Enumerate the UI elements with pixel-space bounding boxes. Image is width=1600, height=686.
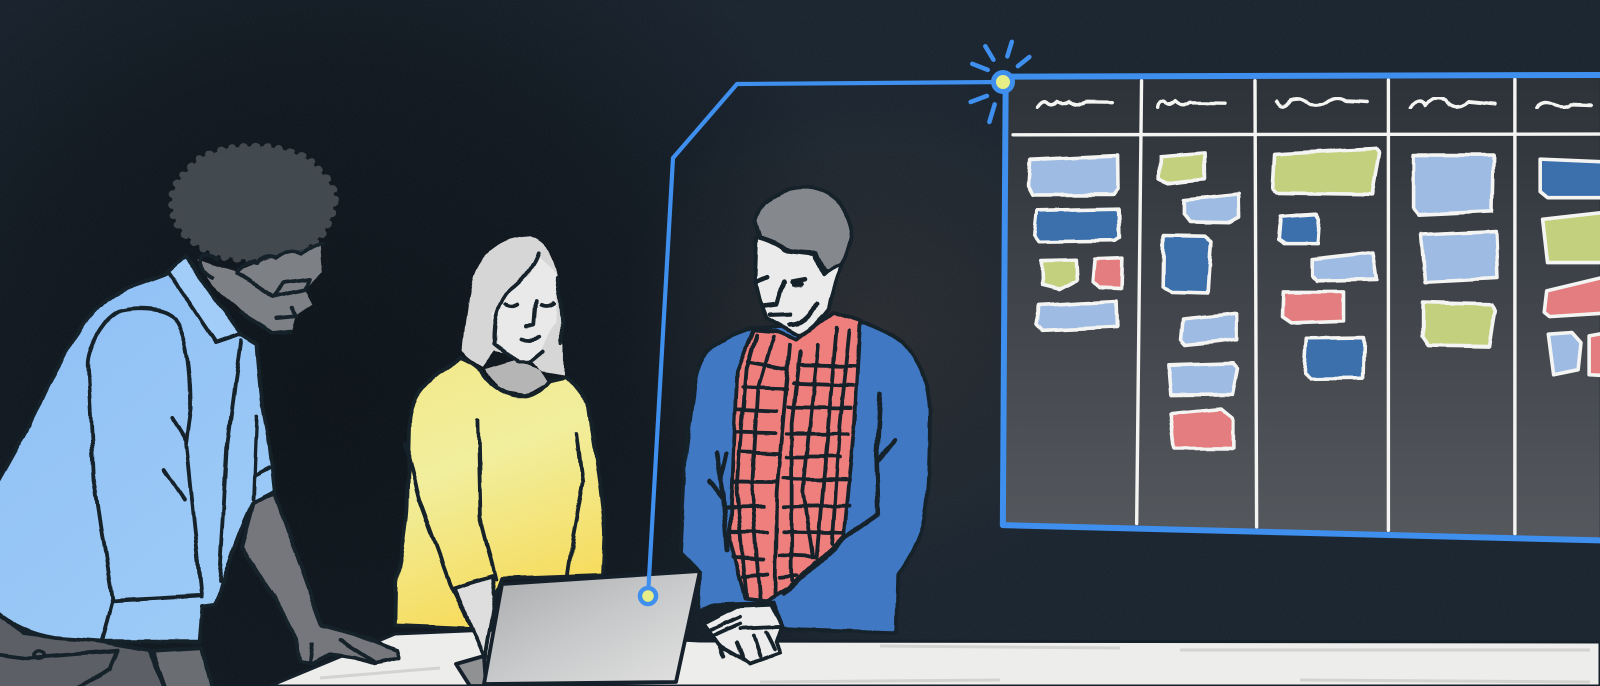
finger lines bbox=[310, 640, 374, 662]
cards: column 1 bbox=[1029, 155, 1122, 331]
cards: column 2 bbox=[1159, 153, 1239, 448]
other arm stub bbox=[152, 648, 212, 686]
person right: man in plaid shirt bbox=[680, 188, 930, 664]
hairline, ear and glasses bbox=[199, 243, 322, 333]
shirt bbox=[0, 255, 275, 642]
hands bbox=[703, 605, 782, 664]
face bbox=[755, 237, 842, 336]
sweater bbox=[395, 358, 605, 629]
shirt details bbox=[88, 308, 269, 640]
screen bbox=[484, 571, 700, 684]
column heading squiggles bbox=[1038, 98, 1590, 108]
forearm and hand bbox=[241, 494, 399, 663]
facial features bbox=[757, 277, 817, 324]
sweater bbox=[680, 323, 930, 633]
board connector node bbox=[994, 72, 1012, 92]
plaid shirt bbox=[730, 312, 861, 601]
cards: column 4 bbox=[1414, 155, 1497, 346]
facial lines bbox=[494, 253, 562, 363]
sweater folds bbox=[405, 420, 583, 654]
trousers bbox=[0, 613, 166, 686]
person left: man in blue shirt bbox=[0, 145, 399, 686]
face bbox=[492, 255, 557, 363]
arm bbox=[454, 576, 495, 658]
sparkle rays bbox=[971, 42, 1029, 122]
board blue frame bbox=[1003, 75, 1600, 540]
kanban board bbox=[971, 42, 1600, 540]
column and header grid lines bbox=[1013, 79, 1600, 534]
face bbox=[196, 245, 322, 333]
hair bbox=[755, 188, 852, 278]
cards: column 5 bbox=[1540, 159, 1600, 375]
hair bbox=[463, 236, 563, 375]
table bbox=[270, 630, 1600, 686]
board surface bbox=[1003, 74, 1600, 540]
plaid lines bbox=[727, 328, 857, 598]
person middle: woman in yellow bbox=[395, 236, 605, 658]
cards: column 3 bbox=[1272, 149, 1379, 379]
laptop connector node bbox=[640, 588, 656, 604]
keyboard base bbox=[456, 656, 486, 686]
neck bbox=[484, 360, 548, 394]
connector line from laptop to board bbox=[648, 82, 1003, 596]
laptop bbox=[456, 571, 700, 686]
collar bbox=[168, 256, 241, 342]
sleeve fold lines bbox=[709, 394, 895, 594]
hair bbox=[172, 145, 334, 261]
